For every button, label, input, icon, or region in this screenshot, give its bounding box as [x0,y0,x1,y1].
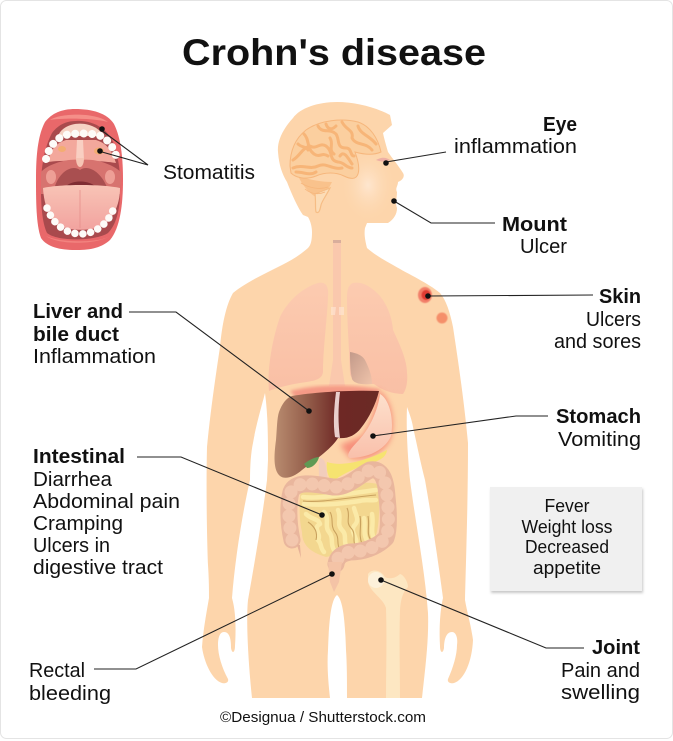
intestinal label: Ulcers in [33,534,110,557]
liver and bile duct label: Liver and [33,300,123,323]
rectum [328,562,342,592]
mouth illustration [36,109,123,250]
stomach label [370,405,641,451]
general symptoms box: Decreased [525,537,609,557]
title: Crohn's disease [182,31,486,73]
eye label: inflammation [454,135,577,158]
small intestine [300,483,379,557]
uvula [76,158,84,167]
liver and bile duct label [33,300,312,414]
heart notch [350,352,372,384]
liver [275,385,380,478]
palate [48,140,116,163]
intestinal label: Abdominal pain [33,490,180,513]
liver and bile duct label: Inflammation [33,345,156,368]
skin sores [418,287,448,324]
joint label [378,577,640,704]
skin label: Skin [599,285,641,308]
intestinal label: Diarrhea [33,468,113,491]
joint label: swelling [561,681,640,704]
rectal bleeding label: Rectal [29,659,85,682]
cerebrum [290,120,381,178]
stomatitis label [97,126,255,184]
joint label: Pain and [561,659,640,682]
lower teeth [47,208,114,234]
mount label: Mount [502,213,567,236]
gum [58,124,104,136]
throat arch [41,160,121,194]
eye label: Eye [543,113,577,136]
cerebellum [298,176,332,200]
liver and bile duct label: bile duct [33,323,119,346]
appendix [297,545,301,558]
rectal bleeding label: bleeding [29,682,111,705]
mount label [391,198,567,258]
gallbladder and pancreas [304,450,387,482]
tonsils [46,170,56,184]
intestinal label: Cramping [33,512,123,535]
skin label: and sores [554,330,641,353]
skin label [425,285,641,353]
eye [376,158,390,162]
joint label: Joint [592,636,640,659]
general symptoms box [490,487,643,593]
intestinal label: digestive tract [33,556,163,579]
lungs [269,283,407,394]
intestinal label [33,445,325,579]
stomach [340,390,393,459]
brain [290,120,381,213]
femur bone [368,570,408,698]
brain stem [315,188,330,213]
stomatitis label: Stomatitis [163,161,255,184]
right lung [347,283,407,394]
stomach label: Stomach [556,405,641,428]
general symptoms box: Weight loss [522,517,612,537]
tongue [43,185,120,230]
stomatitis sores [58,146,66,152]
rectal bleeding label [29,571,335,705]
left lung [269,283,328,391]
intestinal label: Intestinal [33,445,125,468]
intestines [289,470,388,592]
outer lips [36,109,123,250]
skin label: Ulcers [586,308,641,331]
credit: ©Designua / Shutterstock.com [220,710,426,726]
body silhouette [202,102,473,698]
mouth interior [41,121,120,239]
trachea and esophagus [329,240,345,386]
stomach label: Vomiting [558,428,641,451]
eye label [383,113,577,166]
colon [289,470,388,564]
mount label: Ulcer [520,235,567,258]
upper teeth [46,134,117,159]
general symptoms box: appetite [533,558,601,578]
general symptoms box: Fever [544,496,590,516]
